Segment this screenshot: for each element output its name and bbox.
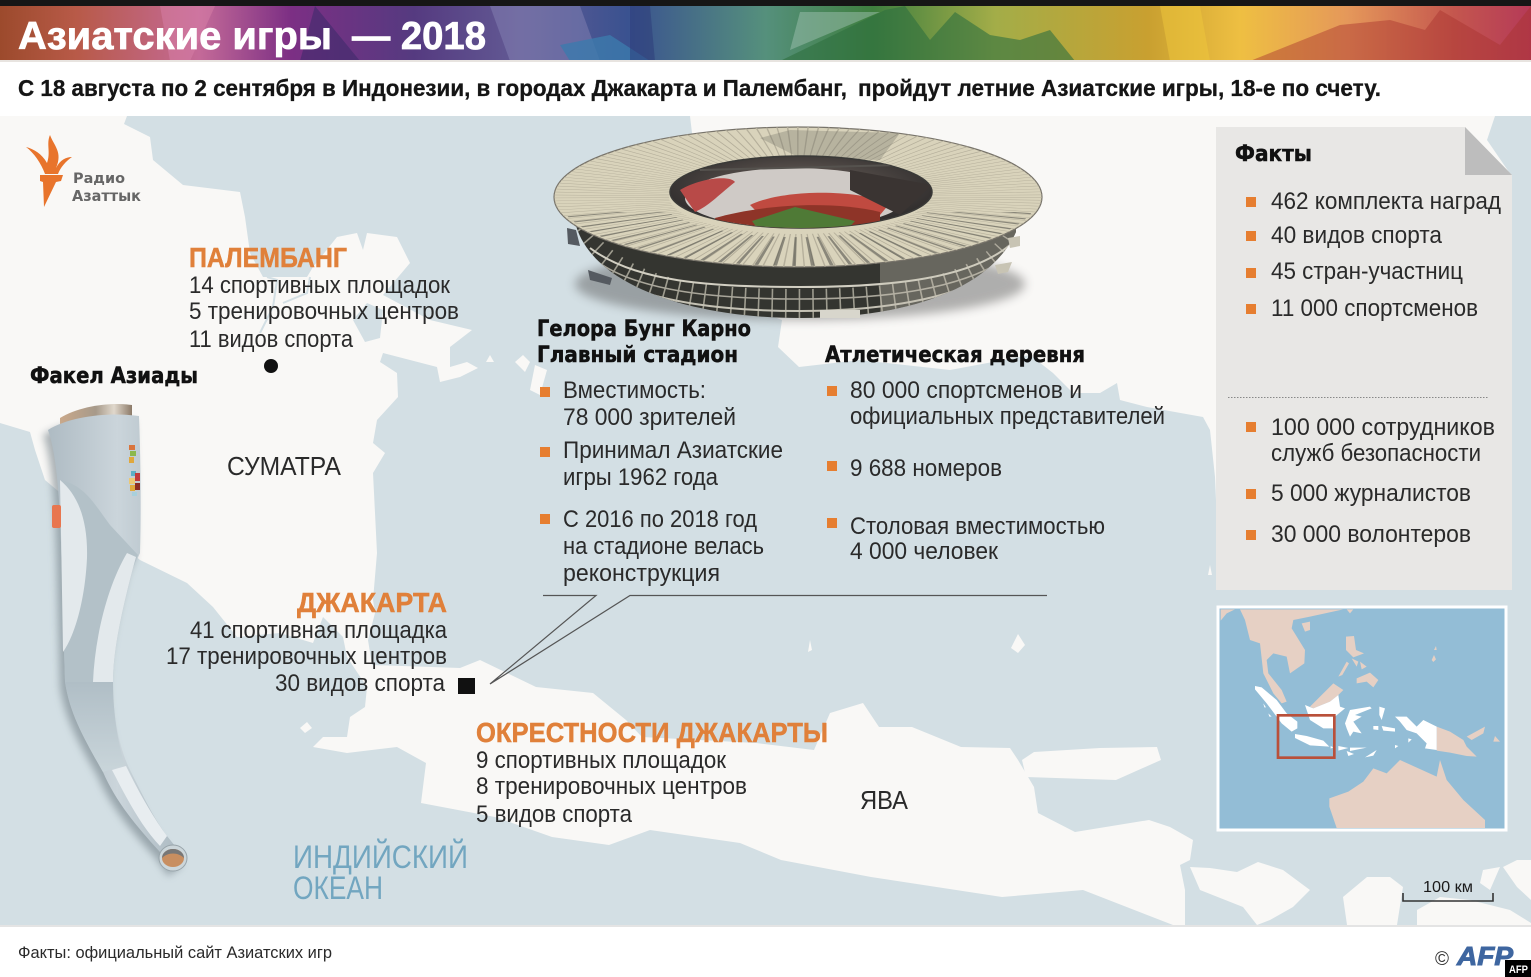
subtitle: пройдут летние Азиатские игры, 18-е по счету. <box>858 75 1381 101</box>
torch heading: Факел Азиады <box>30 364 198 389</box>
title <box>18 15 486 58</box>
Athletes village facts: 80 000 спортсменов и <box>850 377 1082 404</box>
Gelora stadium facts: игры 1962 года <box>563 464 719 491</box>
islets <box>300 355 1212 733</box>
Jakarta surroundings block: ОКРЕСТНОСТИ ДЖАКАРТЫ <box>476 717 828 748</box>
callout leader to Jakarta <box>490 596 1047 684</box>
label: Indian Ocean: ОКЕАН <box>293 870 383 906</box>
Gelora stadium facts: С 2016 по 2018 год <box>563 506 757 533</box>
Palembang block: 5 тренировочных центров <box>189 298 459 325</box>
AFP credit: AFP <box>1456 941 1514 971</box>
panel: facts: 100 000 сотрудников <box>1271 414 1495 441</box>
subtitle: С 18 августа по 2 сентября в Индонезии, в городах Джакарта и Палембанг, <box>18 75 847 101</box>
label: Sumatra: СУМАТРА <box>227 451 342 481</box>
logo: Radio Azattyk: Радио <box>73 171 125 187</box>
logo: Radio Azattyk: Азаттык <box>72 187 141 205</box>
base ring <box>159 845 187 871</box>
AFP credit: AFP <box>1509 964 1528 976</box>
stadium illustration <box>554 127 1042 320</box>
footer rule <box>0 925 1531 927</box>
heading <box>537 317 751 368</box>
Jakarta marker <box>458 678 475 694</box>
logo: Radio Azattyk <box>26 135 141 207</box>
AFP credit <box>1435 941 1531 977</box>
Jakarta block <box>166 587 448 697</box>
Bali <box>1190 862 1310 925</box>
Jakarta surroundings block: 5 видов спорта <box>476 801 633 828</box>
emblem <box>129 445 140 496</box>
Gelora stadium facts: 78 000 зрителей <box>563 404 736 431</box>
Jakarta block: 17 тренировочных центров <box>166 643 447 670</box>
Jakarta block: ДЖАКАРТА <box>297 587 447 618</box>
Jakarta surroundings block: 9 спортивных площадок <box>476 747 726 774</box>
inset locator rectangle <box>1278 715 1334 758</box>
Athletes village facts: 4 000 человек <box>850 538 998 565</box>
folded corner <box>1465 127 1512 175</box>
subtitle <box>18 75 1381 101</box>
scale bar: 100 км <box>1423 879 1473 896</box>
Athletes village facts <box>825 343 1165 565</box>
header banner <box>0 6 1531 62</box>
title: — 2018 <box>352 15 486 58</box>
label: Java: ЯВА <box>860 785 909 815</box>
panel: facts: 45 стран-участниц <box>1271 258 1463 285</box>
stadium outer wall <box>567 226 1020 318</box>
Palembang block: 14 спортивных площадок <box>189 272 450 299</box>
Athletes village facts: 9 688 номеров <box>850 455 1002 482</box>
Madura <box>1022 747 1161 780</box>
Athletes village facts: Столовая вместимостью <box>850 513 1105 540</box>
igniter button <box>52 505 61 528</box>
label: Indian Ocean: ИНДИЙСКИЙ <box>293 839 468 875</box>
Palembang block: 11 видов спорта <box>189 326 354 353</box>
Lombok <box>1343 877 1403 925</box>
heading: Гелора Бунг Карно <box>537 317 751 342</box>
panel: facts: 40 видов спорта <box>1271 222 1443 249</box>
Gelora stadium facts: на стадионе велась <box>563 533 764 560</box>
Gelora stadium facts: реконструкция <box>563 560 720 587</box>
Athletes village facts: Атлетическая деревня <box>825 343 1085 368</box>
Jakarta surroundings block <box>476 717 828 828</box>
title: Азиатские игры <box>18 15 332 58</box>
Jakarta block: 30 видов спорта <box>275 670 446 697</box>
panel: facts: 30 000 волонтеров <box>1271 521 1471 548</box>
locator inset map <box>1218 607 1506 830</box>
AFP credit: © <box>1435 949 1449 970</box>
heading: Главный стадион <box>537 343 738 368</box>
panel: facts: Факты <box>1235 142 1312 167</box>
Sumbawa <box>1417 860 1531 925</box>
label: Indian Ocean <box>293 839 468 906</box>
Gelora stadium facts: Принимал Азиатские <box>563 437 783 464</box>
Palembang block <box>189 242 459 353</box>
stadium roof <box>554 127 1042 267</box>
torch illustration <box>43 404 187 876</box>
Borneo <box>690 116 1511 500</box>
Palembang marker <box>264 359 278 373</box>
Athletes village facts: официальных представителей <box>850 403 1165 430</box>
panel: facts: 5 000 журналистов <box>1271 480 1471 507</box>
stadium bowl and pitch <box>670 156 932 232</box>
panel: facts: 462 комплекта наград <box>1271 188 1501 215</box>
Jakarta surroundings block: 8 тренировочных центров <box>476 773 747 800</box>
panel: facts: 11 000 спортсменов <box>1271 295 1478 322</box>
panel: facts: служб безопасности <box>1271 440 1481 467</box>
scale bar <box>1403 879 1493 901</box>
Gelora stadium facts <box>537 317 783 587</box>
panel: facts <box>1216 127 1512 590</box>
Jakarta block: 41 спортивная площадка <box>190 617 448 644</box>
Palembang block: ПАЛЕМБАНГ <box>189 242 347 273</box>
top black bar <box>0 0 1531 6</box>
source note: Факты: официальный сайт Азиатских игр <box>18 943 332 962</box>
Gelora stadium facts: Вместимость: <box>563 377 706 404</box>
